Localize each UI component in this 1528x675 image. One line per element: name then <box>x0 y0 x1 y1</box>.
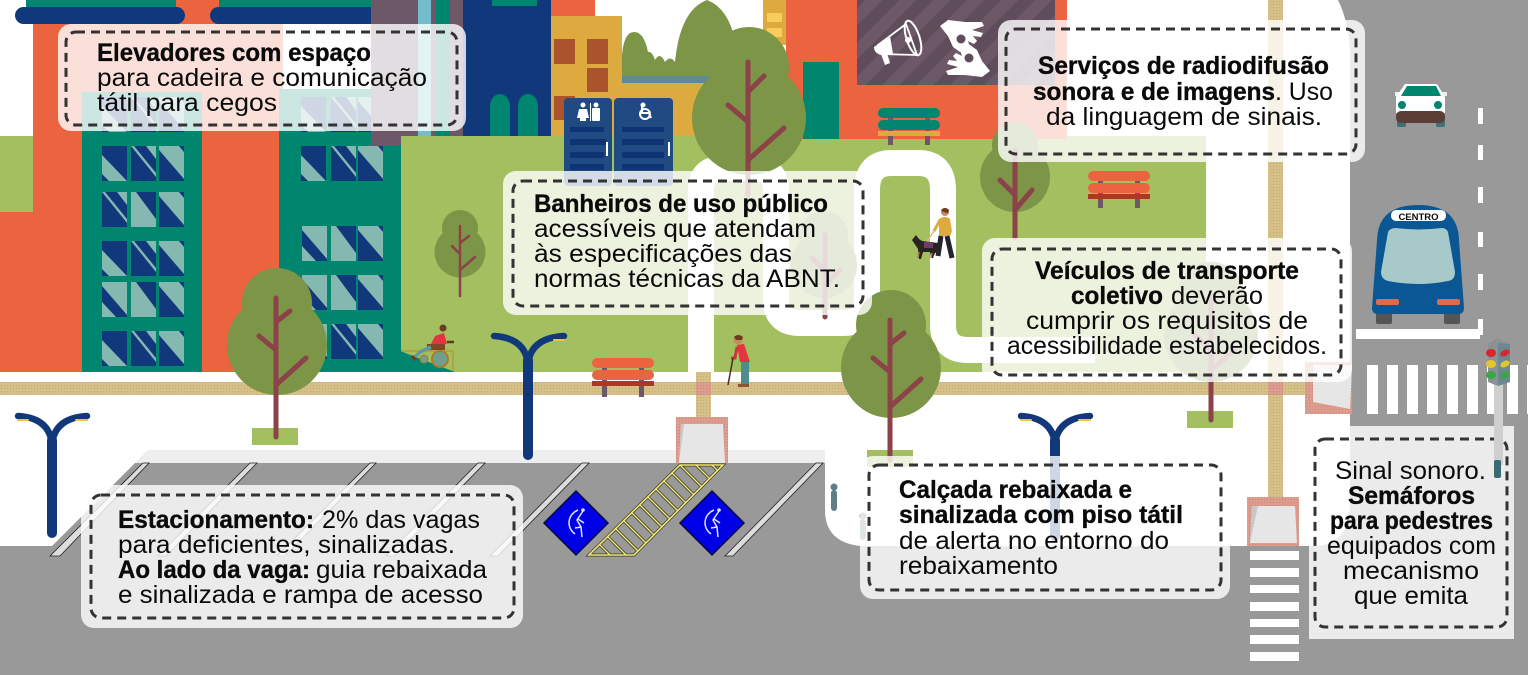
bollards <box>830 484 866 540</box>
lamp 2 <box>494 336 564 455</box>
bus: CENTRO <box>1398 212 1439 223</box>
bus <box>1372 205 1464 324</box>
panel: Serviços de radiodifusão: . Uso <box>1275 78 1333 106</box>
roof slabs <box>15 7 380 24</box>
panel: Elevadores <box>58 24 466 131</box>
panel: Banheiros: Banheiros de uso público <box>534 190 828 218</box>
panel: Sinal sonoro: Semáforos <box>1348 482 1475 510</box>
icon: signing hands <box>940 20 990 77</box>
upper hand <box>940 20 984 54</box>
windows tower 2 <box>301 97 383 359</box>
panel: Estacionamento <box>81 485 523 628</box>
panel: Sinal sonoro <box>1309 426 1514 639</box>
panel: Sinal sonoro: que emita <box>1354 582 1468 610</box>
tree with base centre <box>841 290 941 467</box>
billboard: megaphone and sign language <box>857 0 1055 85</box>
panel: Veículos de transporte: cumprir os requisitos de <box>1026 307 1308 335</box>
orange building <box>786 0 1067 139</box>
sidewalk corner <box>825 450 880 546</box>
lamp 3 <box>1021 416 1090 536</box>
road stop line and lane dashes <box>1356 108 1483 339</box>
tree behind bathroom panel <box>791 211 857 317</box>
orange bench park <box>1088 171 1150 208</box>
buildings centre <box>551 0 1067 139</box>
icon: megaphone <box>874 19 925 65</box>
panel: Estacionamento: e sinalizada e rampa de acesso <box>118 581 483 609</box>
icon: restroom <box>577 102 600 121</box>
panel: Sinal sonoro: mecanismo <box>1343 557 1479 585</box>
panel: Sinal sonoro: Sinal sonoro. <box>1335 457 1486 485</box>
panel: Sinal sonoro: para pedestres <box>1330 507 1493 535</box>
panel: Veículos de transporte: coletivo <box>1071 282 1163 310</box>
panel: Banheiros: às especificações das <box>534 240 792 268</box>
panel: Veículos de transporte <box>982 238 1352 382</box>
buildings left <box>0 0 551 372</box>
parking space lines <box>50 463 823 556</box>
panel: Sinal sonoro: equipados com <box>1327 532 1496 560</box>
panel: Veículos de transporte: Veículos de transporte <box>1035 257 1299 285</box>
panel: Elevadores: para cadeira e comunicação <box>97 64 427 92</box>
traffic light <box>1486 338 1511 478</box>
icon: wheelchair <box>640 104 651 119</box>
panel: Veículos de transporte: acessibilidade estabelecidos. <box>1007 332 1327 360</box>
door <box>803 62 839 139</box>
crosswalk horizontal <box>1250 551 1299 661</box>
panel: Estacionamento: Ao lado da vaga: <box>118 556 310 584</box>
car <box>1395 84 1447 127</box>
panel: Banheiros <box>503 171 872 315</box>
panel: Estacionamento: guia rebaixada <box>316 556 487 584</box>
tactile paving <box>0 0 1305 497</box>
panel: Serviços de radiodifusão <box>998 20 1365 162</box>
bushes <box>622 0 735 76</box>
panel: Serviços de radiodifusão: da linguagem de sinais. <box>1046 103 1322 131</box>
navy building <box>463 0 551 145</box>
icon: guide dog <box>912 235 938 259</box>
lower hand <box>946 43 990 77</box>
ramp right <box>1305 362 1352 414</box>
yellow tower <box>763 0 786 45</box>
panel: Calçada rebaixada: rebaixamento <box>899 552 1058 580</box>
panel: Serviços de radiodifusão: Serviços de radiodifusão <box>1038 52 1329 80</box>
panel: Banheiros: normas técnicas da ABNT. <box>534 265 840 293</box>
bathroom doors <box>564 98 673 186</box>
ramp centre <box>676 417 728 463</box>
park lawn <box>401 136 1206 372</box>
panel: Calçada rebaixada <box>860 456 1230 599</box>
panel: Serviços de radiodifusão: sonora e de imagens <box>1033 78 1275 106</box>
tall tree <box>692 27 806 195</box>
panel: Calçada rebaixada: sinalizada com piso tátil <box>899 501 1183 529</box>
panel: Calçada rebaixada: Calçada rebaixada e <box>899 476 1132 504</box>
panel: Elevadores: tátil para cegos <box>97 89 277 117</box>
accessible parking sign 1 <box>544 491 608 555</box>
panel: Elevadores: Elevadores com espaço <box>97 39 371 67</box>
panel: Veículos de transporte: deverão <box>1171 282 1263 310</box>
parking lot <box>52 463 870 546</box>
dog guide walker <box>912 208 952 259</box>
parking curb <box>135 450 826 463</box>
street lamps <box>18 336 1090 536</box>
tree with base left <box>227 268 327 445</box>
ramp accessible wheelchair <box>400 324 455 372</box>
panel: Estacionamento: para deficientes, sinalizadas. <box>118 531 455 559</box>
elderly pedestrian with cane <box>728 335 750 387</box>
tree far right park <box>980 122 1050 238</box>
orange bench sidewalk <box>592 358 654 397</box>
purple building <box>371 0 463 145</box>
panel: Estacionamento: 2% das vagas <box>322 506 480 534</box>
yellow hatched access ramp <box>589 465 723 555</box>
panel: Banheiros: acessíveis que atendam <box>534 215 816 243</box>
green bench <box>878 108 940 145</box>
ramp bottom <box>1247 497 1299 546</box>
white serpentine path <box>701 163 1095 372</box>
panel: Calçada rebaixada: de alerta no entorno do <box>899 527 1169 555</box>
panel: Estacionamento: Estacionamento: <box>118 506 314 534</box>
accessible parking sign 2 <box>680 491 744 555</box>
crosswalk vertical <box>1367 365 1528 414</box>
icon: wheelchair user <box>412 324 454 367</box>
lamp 1 <box>18 416 87 533</box>
windows tower 1 <box>102 97 184 366</box>
small tree <box>434 210 486 296</box>
tree with base right <box>1164 262 1258 428</box>
